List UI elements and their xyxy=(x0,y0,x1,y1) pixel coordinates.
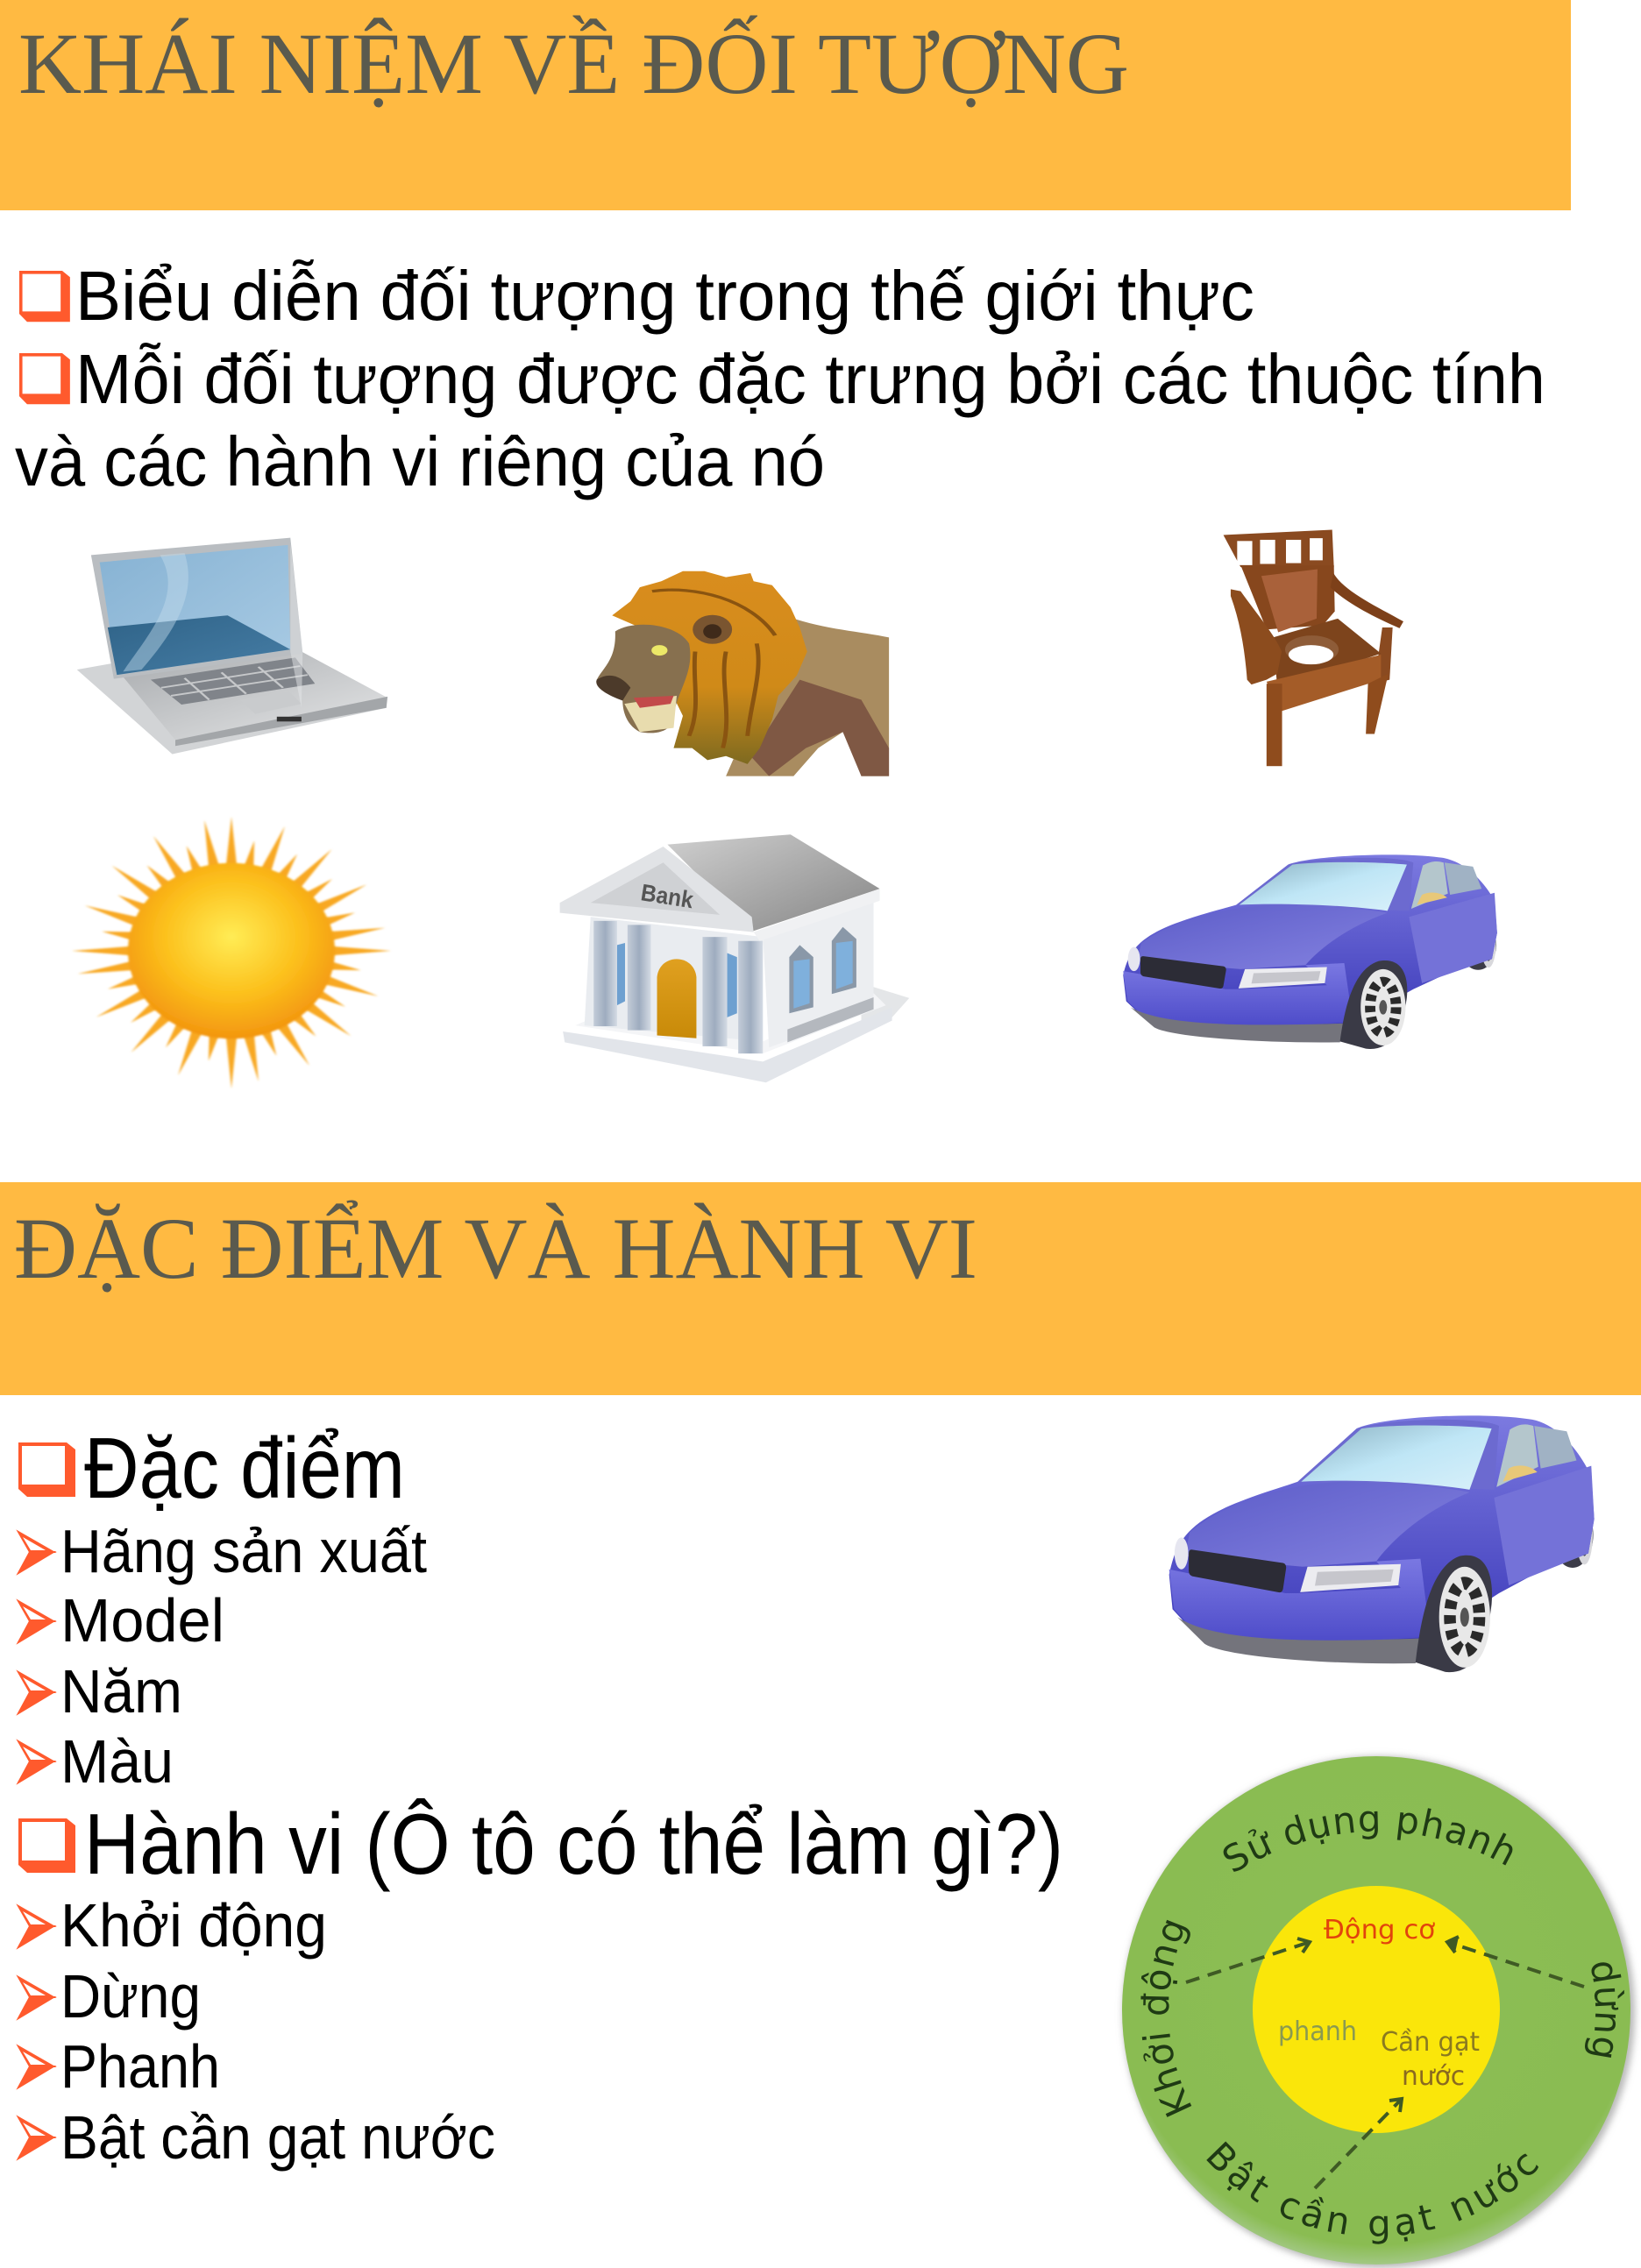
label: cần gạt: Cần gạt xyxy=(1381,2027,1480,2058)
banner: khái niệm về đối tượng xyxy=(0,0,1571,210)
text block: đặc điểm list xyxy=(18,1420,427,1796)
label: sử dụng phanh: Sử dụng phanh xyxy=(1224,1808,1513,1872)
icon: square bullet xyxy=(18,1818,75,1873)
label: bật cần gạt nước: Bật cần gạt nước xyxy=(1206,2142,1538,2244)
diagram: car object circle xyxy=(1119,1753,1639,2268)
text block: object definition xyxy=(15,257,1545,500)
text block: hành vi list xyxy=(18,1796,1063,2172)
banner: đặc điểm và hành vi xyxy=(0,1182,1641,1395)
label: dừng: dừng xyxy=(1585,1962,1624,2058)
list item: bật cần gạt nước: Bật cần gạt nước xyxy=(60,2103,495,2172)
label: động cơ: Động cơ xyxy=(1324,1915,1436,1946)
text line: và các hành vi: và các hành vi riêng của nó xyxy=(15,422,825,500)
list item: khởi động: Khởi động xyxy=(60,1891,327,1960)
list item: dừng: Dừng xyxy=(60,1962,201,2031)
list item: phanh: Phanh xyxy=(60,2032,220,2101)
arrow: khởi động to động cơ xyxy=(1186,1938,1310,1982)
icon: square bullet xyxy=(18,1442,75,1497)
arrow: dừng to động cơ xyxy=(1447,1937,1584,1987)
icon: square bullet 2 xyxy=(19,353,70,404)
icon: square bullet 1 xyxy=(19,271,70,322)
heading: khái niệm về đối tượng: KHÁI NIỆM VỀ ĐỐI TƯỢNG xyxy=(18,15,1129,112)
icon: chair xyxy=(1224,529,1403,766)
icon: sun xyxy=(72,817,391,1088)
text line: biểu diễn đối tượng: Biểu diễn đối tượng trong thế giới thực xyxy=(75,257,1254,335)
label: Bank: Bank xyxy=(639,879,696,913)
list item: model: Model xyxy=(60,1586,224,1655)
text line: mỗi đối tượng: Mỗi đối tượng được đặc trưng bởi các thuộc tính xyxy=(75,340,1545,418)
list item: năm: Năm xyxy=(60,1657,182,1726)
list item: màu: Màu xyxy=(60,1727,174,1796)
label: phanh: phanh xyxy=(1278,2016,1357,2047)
icon: laptop xyxy=(77,538,387,754)
arrow: bật cần gạt nước to cần gạt nước xyxy=(1315,2099,1402,2188)
icon: lion xyxy=(596,571,889,776)
icon: bank building xyxy=(560,834,909,1082)
icon: large car xyxy=(1169,1415,1595,1672)
icon: car xyxy=(1123,854,1497,1049)
heading: hành vi: Hành vi (Ô tô có thể làm gì?) xyxy=(84,1796,1063,1892)
inner circle: state xyxy=(1253,1886,1500,2133)
label: nước: nước xyxy=(1402,2061,1465,2092)
label: khởi động: Khởi động xyxy=(1140,1919,1192,2117)
list item: hãng sản xuất: Hãng sản xuất xyxy=(60,1517,427,1585)
heading: đặc điểm: Đặc điểm xyxy=(84,1420,405,1516)
heading: đặc điểm và hành vi: ĐẶC ĐIỂM VÀ HÀNH VI xyxy=(14,1200,977,1297)
